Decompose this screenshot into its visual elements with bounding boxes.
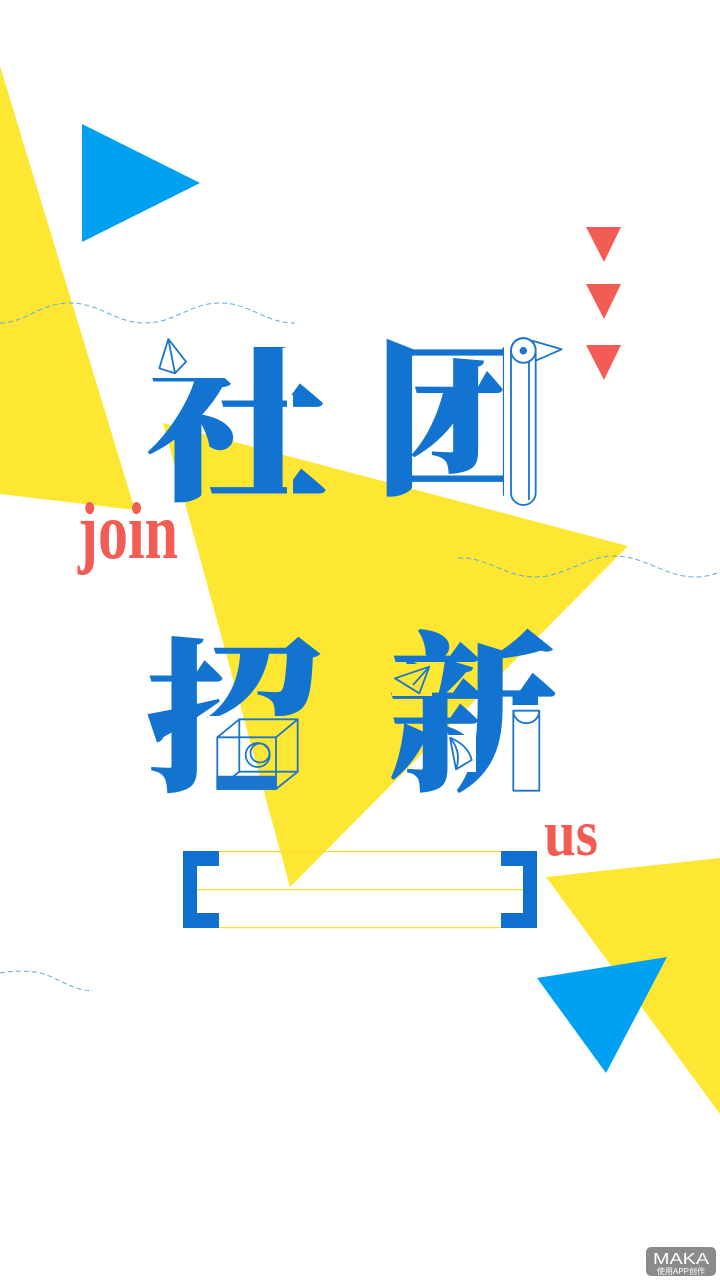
label: join: join bbox=[77, 488, 178, 576]
dashed wave: middle right bbox=[458, 556, 720, 577]
blue triangle: top left bbox=[82, 124, 200, 242]
heading: 团: 团 bbox=[374, 288, 542, 529]
dashed wave: upper left bbox=[0, 303, 295, 323]
left bracket bbox=[183, 851, 219, 928]
icon: pyramid outline bbox=[159, 339, 186, 373]
red triangles bbox=[586, 227, 621, 380]
icon: wire cube with ball bbox=[217, 719, 298, 789]
frame lines bbox=[197, 851, 523, 928]
icon: sail outline bbox=[450, 738, 472, 769]
bracket frame bbox=[183, 851, 537, 928]
heading: 新: 新 bbox=[388, 579, 557, 825]
watermark: MAKA: 使用APP创作 bbox=[657, 1266, 705, 1276]
heading: 社: 社 bbox=[146, 287, 328, 536]
yellow triangle: top left bbox=[0, 66, 135, 510]
blue triangle: bottom right bbox=[537, 957, 667, 1073]
icon: rectangle with arc bbox=[513, 711, 539, 791]
icon: bird outline bbox=[511, 338, 562, 505]
icon: paper plane outline bbox=[395, 667, 429, 693]
right bracket bbox=[501, 851, 537, 928]
yellow triangle: bottom right bbox=[546, 858, 720, 1114]
watermark: MAKA bbox=[646, 1247, 716, 1276]
heading: 招: 招 bbox=[146, 588, 323, 824]
dashed wave: lower left bbox=[0, 971, 93, 991]
yellow triangle: centre bbox=[163, 423, 628, 887]
watermark: MAKA: MAKA bbox=[653, 1251, 709, 1268]
label: us: us bbox=[544, 797, 598, 870]
